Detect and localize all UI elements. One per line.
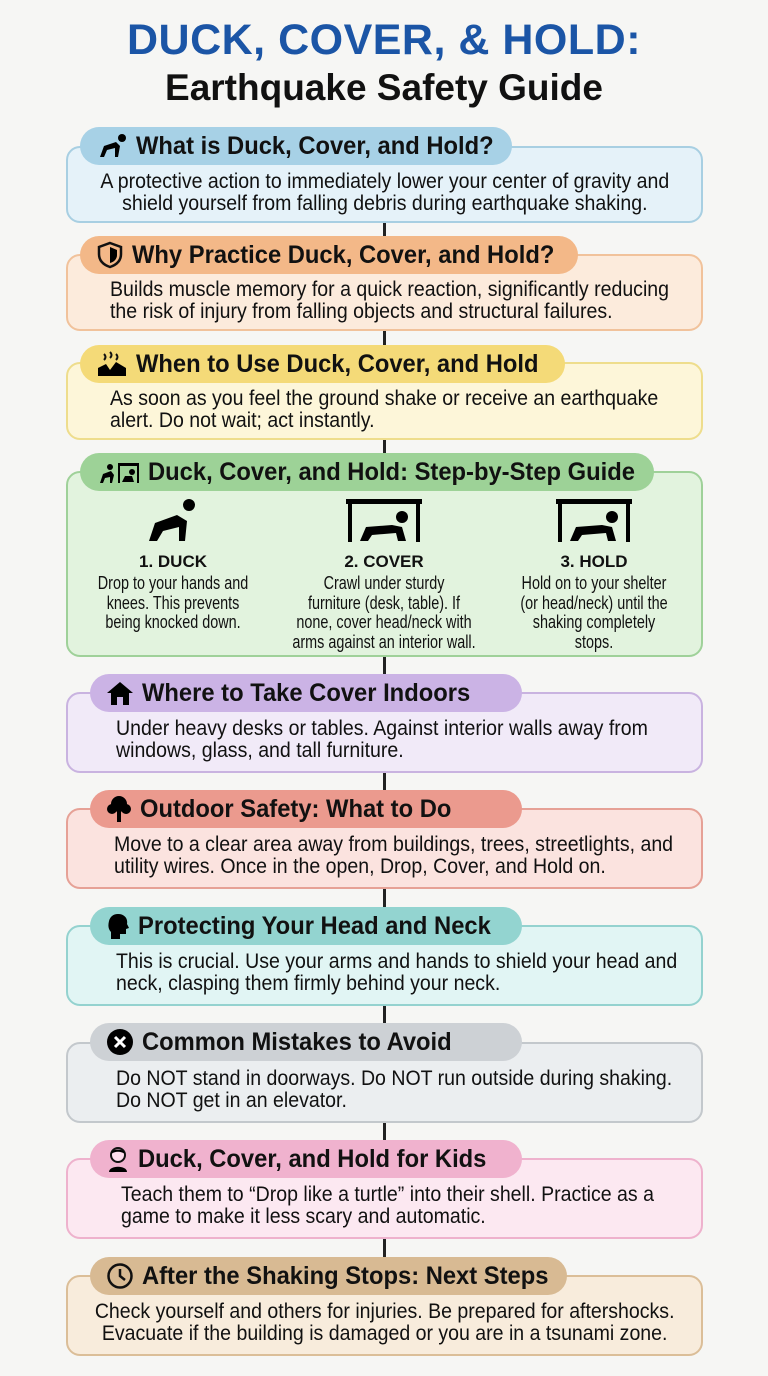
heading: after (90, 1257, 567, 1295)
text: head and neck: neck, clasping them firmly behind your neck. (116, 972, 500, 995)
heading: why practice: Why Practice Duck, Cover, and Hold? (132, 240, 554, 268)
text: kids: game to make it less scary and automatic. (121, 1205, 486, 1228)
step: duck: knees. This prevents (107, 592, 239, 612)
icon: hold (556, 499, 632, 542)
text: outdoor: Move to a clear area away from buildings, trees, streetlights, and (114, 833, 673, 856)
text: outdoor (114, 833, 673, 878)
step: hold: stops. (575, 632, 613, 652)
text: mistakes (116, 1067, 672, 1112)
step: cover: furniture (desk, table). If (308, 592, 460, 612)
heading: what is: What is Duck, Cover, and Hold? (136, 132, 494, 160)
text: outdoor: utility wires. Once in the open, Drop, Cover, and Hold on. (114, 855, 606, 878)
panel: mistakes (66, 1023, 703, 1123)
text: why practice (110, 278, 669, 323)
heading: kids: Duck, Cover, and Hold for Kids (138, 1144, 486, 1172)
heading: kids (90, 1140, 522, 1178)
panel: after (66, 1257, 703, 1356)
step: hold (520, 499, 668, 652)
text: after: Check yourself and others for injuries. Be prepared for aftershocks. (95, 1300, 674, 1323)
step: cover: 2. COVER (344, 552, 424, 570)
text: indoors: Under heavy desks or tables. Against interior walls away from (116, 717, 648, 740)
step: cover: Crawl under sturdy (324, 573, 444, 593)
text: after (95, 1300, 674, 1345)
step: duck: 1. DUCK (139, 552, 207, 570)
text: indoors: windows, glass, and tall furniture. (116, 739, 404, 762)
panel: why practice (66, 236, 703, 331)
text: why practice: the risk of injury from falling objects and structural failures. (110, 300, 613, 323)
text: when to use (110, 387, 658, 432)
step: hold: shaking completely (533, 612, 655, 632)
heading: mistakes (90, 1023, 522, 1061)
title: DUCK, COVER, & HOLD: (127, 16, 641, 64)
step: duck (98, 499, 248, 632)
step: hold: (or head/neck) until the (520, 592, 668, 612)
heading: indoors: Where to Take Cover Indoors (142, 678, 470, 706)
step: duck: being knocked down. (105, 612, 241, 632)
panel: indoors (66, 674, 703, 773)
text: indoors (116, 717, 648, 762)
text: when to use: As soon as you feel the ground shake or receive an earthquake (110, 387, 658, 410)
heading: head and neck: Protecting Your Head and Neck (138, 912, 491, 940)
heading: when to use (80, 345, 565, 383)
heading: outdoor: Outdoor Safety: What to Do (140, 794, 451, 822)
heading: why practice (80, 236, 578, 274)
heading: indoors (90, 674, 522, 712)
heading: mistakes: Common Mistakes to Avoid (142, 1028, 452, 1056)
title: Earthquake Safety Guide (165, 67, 603, 108)
heading: after: After the Shaking Stops: Next Steps (142, 1262, 548, 1290)
panel: what is (66, 127, 703, 223)
panel: when to use (66, 345, 703, 440)
panel: outdoor (66, 790, 703, 889)
text: what is (100, 170, 669, 215)
step: hold: Hold on to your shelter (522, 573, 666, 593)
panel: kids (66, 1140, 703, 1239)
text: when to use: alert. Do not wait; act instantly. (110, 409, 374, 432)
text: head and neck (116, 950, 677, 995)
text: mistakes: Do NOT stand in doorways. Do NOT run outside during shaking. (116, 1067, 672, 1090)
text: kids: Teach them to “Drop like a turtle” into their shell. Practice as a (121, 1183, 654, 1206)
text: why practice: Builds muscle memory for a quick reaction, significantly reducing (110, 278, 669, 301)
step: hold: 3. HOLD (560, 552, 628, 570)
panel: head and neck (66, 907, 703, 1006)
text: mistakes: Do NOT get in an elevator. (116, 1089, 347, 1112)
heading: outdoor (90, 790, 522, 828)
title (127, 16, 641, 108)
text: what is: shield yourself from falling debris during earthquake shaking. (122, 192, 647, 215)
step: duck: Drop to your hands and (98, 573, 248, 593)
panel: step-by-step (66, 453, 703, 657)
heading: step-by-step (80, 453, 654, 491)
step: cover: none, cover head/neck with (296, 612, 472, 632)
heading: what is (80, 127, 512, 165)
icon: duck (149, 499, 195, 541)
heading: step-by-step: Duck, Cover, and Hold: Step-by-Step Guide (148, 458, 635, 486)
text: kids (121, 1183, 654, 1228)
icon: cover (346, 499, 422, 542)
heading: head and neck (90, 907, 522, 945)
step: cover: arms against an interior wall. (292, 632, 476, 652)
text: after: Evacuate if the building is damaged or you are in a tsunami zone. (102, 1322, 667, 1345)
heading: when to use: When to Use Duck, Cover, and Hold (136, 350, 538, 378)
text: what is: A protective action to immediately lower your center of gravity and (100, 170, 669, 193)
step: cover (292, 499, 476, 652)
text: head and neck: This is crucial. Use your arms and hands to shield your head and (116, 950, 677, 973)
